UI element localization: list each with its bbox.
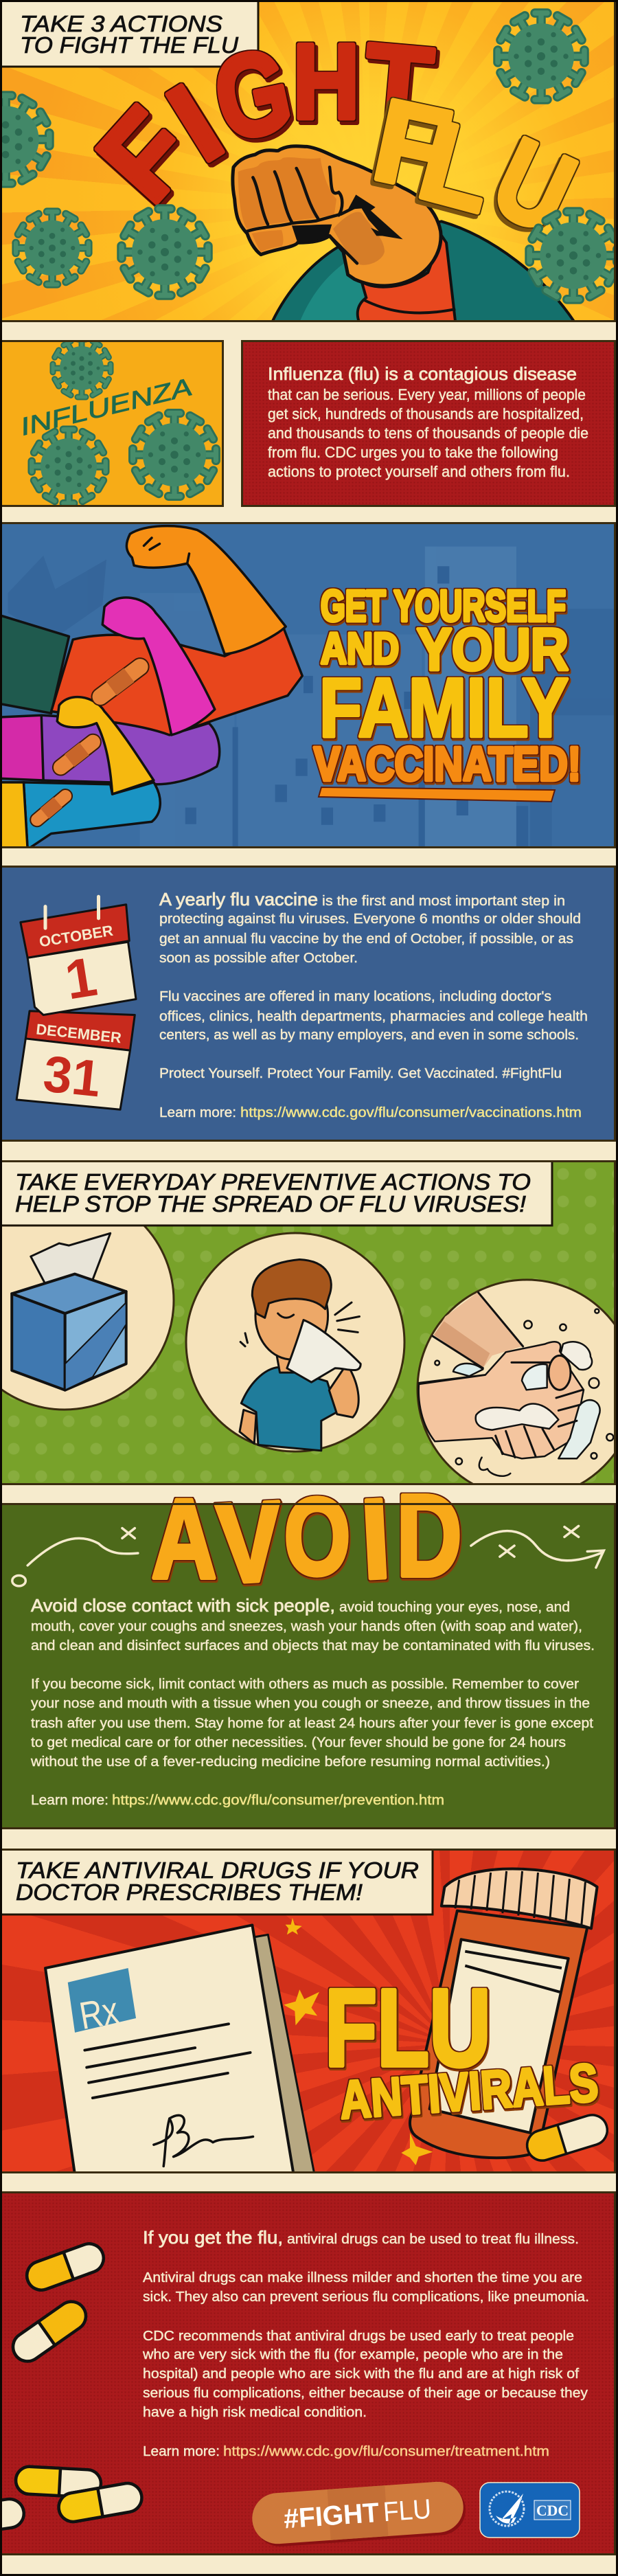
- left arm: [240, 1410, 256, 1443]
- avoid text block: and clean and disinfect surfaces and objects that may be contaminated with flu viruses.: [31, 1638, 595, 1653]
- bandage badge: #fight flu: [251, 2480, 467, 2549]
- hair: [252, 1260, 331, 1318]
- antiviral text block: Learn more:: [143, 2444, 220, 2459]
- avoid text block: If you become sick, limit contact with others as much as possible. Remember to cover: [31, 1677, 579, 1692]
- influenza text block: and thousands to tens of thousands of people die: [268, 425, 588, 442]
- bandage medium: [49, 731, 104, 778]
- influenza text block: Influenza (flu) is a contagious disease: [268, 363, 577, 384]
- tissue box faces: [12, 1274, 126, 1390]
- virus top: [53, 339, 111, 397]
- logo: hhs and cdc: CDC: [536, 2502, 569, 2519]
- signature: [154, 2115, 253, 2166]
- circle: tissue box: [0, 1191, 174, 1410]
- panel: influenza description: [241, 340, 616, 507]
- arm: teal sleeve: [0, 615, 69, 713]
- influenza text block: get sick, hundreds of thousands are hospitalized,: [268, 405, 584, 422]
- rx badge: [68, 1968, 136, 2033]
- antiviral text block: If you get the flu,: [143, 2227, 283, 2248]
- avoid text block: [30, 1595, 595, 1808]
- influenza text block: from flu. CDC urges you to take the following: [268, 444, 558, 461]
- circle: person sneezing into tissue: [186, 1233, 404, 1451]
- lower arm and hand: [419, 1342, 584, 1458]
- prescription lines: [84, 2024, 250, 2098]
- bandage badge: #fight flu: FLU: [382, 2494, 432, 2527]
- vaccine text block: protecting against flu viruses. Everyone 6 months or older should: [159, 912, 581, 927]
- header box: take 3 actions: TAKE 3 ACTIONS: [20, 11, 222, 36]
- arm: magenta: [102, 598, 215, 735]
- flu virus left: [0, 95, 49, 183]
- title word: FIGHT: T: [360, 20, 437, 148]
- fingers: [549, 1355, 571, 1390]
- arm: yellow sleeve: [0, 782, 27, 849]
- panel: antiviral details: [0, 2191, 616, 2555]
- title word: FIGHT: G: [203, 23, 301, 166]
- antiviral text block: hospital) and people who are sick with the flu and are at high risk of: [143, 2366, 579, 2382]
- upper arm: [434, 1293, 522, 1368]
- antiviral text block: https://www.cdc.gov/flu/consumer/treatment.htm: [223, 2444, 549, 2459]
- header box: preventive actions: [0, 1158, 552, 1225]
- avoid text block: avoid touching your eyes, nose, and: [339, 1600, 570, 1615]
- avoid text block: Learn more:: [31, 1793, 108, 1808]
- heading: flu antivirals: FLU: [325, 1966, 491, 2089]
- vaccine text block: is the first and most important step in: [322, 894, 565, 909]
- soap bubbles upper: [561, 1342, 592, 1370]
- vaccine text block: Learn more:: [159, 1105, 236, 1120]
- title word: FLU: L: [408, 96, 507, 236]
- raised arm: [329, 1364, 358, 1417]
- pill two: [8, 2296, 91, 2367]
- logo: hhs and cdc: [480, 2483, 580, 2538]
- heading: avoid: O: [284, 1476, 351, 1598]
- virus right: [133, 414, 216, 496]
- influenza label: INFLUENZA: [17, 372, 195, 441]
- influenza text block: that can be serious. Every year, millions of people: [268, 386, 586, 403]
- calendar: december 31: 31: [41, 1044, 104, 1107]
- vaccine text block: [159, 889, 588, 1120]
- panel: antiviral drugs: [0, 1849, 616, 2173]
- bandage small: [27, 787, 75, 829]
- sneeze lines: [240, 1302, 359, 1346]
- influenza text block: [268, 363, 588, 480]
- rx symbol: Rx: [76, 1988, 122, 2037]
- arrow play diagram right: [471, 1526, 604, 1568]
- title word: FIGHT: I: [148, 61, 242, 185]
- arm: red: [52, 629, 302, 737]
- heading: avoid: I: [358, 1476, 393, 1603]
- arm: orange fist detail: [144, 538, 190, 563]
- arm: orange: [126, 526, 286, 654]
- vaccine text block: get an annual flu vaccine by the end of October, if possible, or as: [159, 931, 573, 947]
- heading: get yourself and your family vaccinated: [314, 581, 581, 791]
- stars: [284, 1918, 433, 2165]
- arm: yellow: [57, 697, 154, 794]
- pill: [523, 2111, 611, 2165]
- avoid text block: trash after you use them. Stay home for at least 24 hours after your fever is gone except: [31, 1716, 593, 1731]
- flu virus right: [529, 212, 617, 300]
- city skyline background: [8, 547, 618, 849]
- heading: get yourself and your family vaccinated: YOUR: [417, 617, 569, 683]
- vaccine text block: A yearly flu vaccine: [159, 889, 318, 909]
- avoid text block: your nose and mouth with a tissue when you cough or sneeze, and throw tissues in the: [31, 1696, 590, 1711]
- flu virus top right: [498, 13, 584, 100]
- illustration: calendars: [16, 896, 136, 1109]
- arrow play diagram left: [12, 1528, 138, 1586]
- calendar: october 1: 1: [61, 946, 101, 1012]
- panel: influenza virus art: [0, 340, 224, 507]
- antiviral text block: CDC recommends that antiviral drugs be used early to treat people: [143, 2329, 574, 2344]
- panel: avoid details: [0, 1503, 616, 1829]
- pill one: [23, 2239, 108, 2294]
- pill bottle cap: [442, 1869, 597, 1928]
- vaccine text block: soon as possible after October.: [159, 951, 358, 966]
- avoid text block: Avoid close contact with sick people,: [31, 1595, 335, 1616]
- arm: magenta sleeve: [0, 715, 43, 780]
- wrist lines: [419, 1293, 523, 1383]
- arm: blue: [23, 782, 160, 849]
- bandage large: [89, 655, 152, 709]
- panel: everyday preventive actions: [0, 1160, 616, 1485]
- heading: avoid: V: [214, 1478, 285, 1607]
- title word: FLU: F: [363, 74, 461, 217]
- heading underline: [319, 787, 555, 802]
- circle: washing hands with soap: [417, 1280, 618, 1498]
- antiviral text block: serious flu complications, either because of their age or because they: [143, 2386, 588, 2401]
- vaccine text block: https://www.cdc.gov/flu/consumer/vaccinations.htm: [240, 1105, 582, 1120]
- calendar: october 1: OCTOBER: [38, 922, 115, 951]
- illustration: family of flexing arms: [0, 526, 302, 849]
- title word: FIGHT: F: [73, 85, 218, 225]
- vaccine text block: offices, clinics, health departments, pharmacies and college health: [159, 1009, 588, 1024]
- head: [255, 1272, 328, 1359]
- antiviral text block: Antiviral drugs can make illness milder and shorten the time you are: [143, 2270, 582, 2285]
- calendar: october 1: [21, 896, 136, 1015]
- avoid text block: https://www.cdc.gov/flu/consumer/prevention.htm: [112, 1793, 444, 1808]
- title word: FLU: U: [476, 113, 593, 258]
- prescription page: [45, 1925, 294, 2175]
- pill three: [15, 2466, 102, 2498]
- panel: get vaccinated: [0, 522, 616, 848]
- pill five: [0, 2497, 25, 2535]
- avoid text block: to get medical care or for other necessities. (Your fever should be gone for 24 hours: [31, 1735, 566, 1750]
- illustration: superhero cape and sleeve: [272, 221, 575, 322]
- header box: preventive actions: HELP STOP THE SPREAD OF FLU VIRUSES!: [15, 1191, 526, 1217]
- vaccine text block: Protect Yourself. Protect Your Family. Get Vaccinated. #FightFlu: [159, 1066, 562, 1081]
- heading: avoid: A: [151, 1476, 217, 1602]
- virus bottom left: [32, 429, 106, 504]
- header box: take 3 actions: [0, 0, 258, 67]
- bandage badge: #fight flu: #FIGHT: [283, 2498, 380, 2534]
- pill four: [56, 2481, 144, 2524]
- antiviral text block: have a high risk medical condition.: [143, 2405, 367, 2420]
- title word: FIGHT: H: [293, 21, 360, 141]
- vaccine text block: centers, as well as by many employers, and even in some schools.: [159, 1028, 579, 1043]
- heading: avoid: D: [396, 1471, 462, 1601]
- influenza text block: actions to protect yourself and others from flu.: [268, 463, 570, 480]
- vaccine text block: Flu vaccines are offered in many locations, including doctor's: [159, 989, 551, 1004]
- neck: [276, 1351, 304, 1372]
- avoid text block: mouth, cover your coughs and sneezes, wash your hands often (with soap and water),: [31, 1619, 582, 1634]
- shirt: [241, 1368, 337, 1451]
- header box: antiviral: [0, 1846, 433, 1914]
- antiviral text block: antiviral drugs can be used to treat flu illness.: [287, 2232, 579, 2247]
- antiviral text block: who are very sick with the flu (for example, people who are in the: [142, 2347, 563, 2362]
- antiviral text block: [142, 2227, 589, 2459]
- pill bottle label: [430, 1939, 569, 2133]
- pill bottle body: [410, 1911, 587, 2158]
- arm: purple: [41, 715, 220, 784]
- title word: FLU: [363, 74, 593, 258]
- title word: FIGHT: [73, 20, 437, 225]
- calendar: december 31: [16, 1011, 135, 1109]
- heading: avoid: [151, 1471, 462, 1607]
- calendar: december 31: DECEMBER: [35, 1020, 122, 1046]
- soap bubbles lower: [476, 1404, 558, 1430]
- bubbles: [435, 1309, 613, 1465]
- header box: preventive actions: TAKE EVERYDAY PREVENTIVE ACTIONS TO: [15, 1169, 531, 1195]
- flu virus center: [122, 209, 208, 295]
- panel: vaccine details: [0, 866, 616, 1142]
- illustration: fist and arm: [233, 146, 455, 323]
- flu virus bottom left: [16, 212, 89, 284]
- header box: antiviral: TAKE ANTIVIRAL DRUGS IF YOUR: [16, 1857, 419, 1883]
- header box: antiviral: DOCTOR PRESCRIBES THEM!: [16, 1879, 363, 1905]
- panel: hero Fight Flu: [0, 0, 616, 322]
- heading: flu antivirals: [325, 1966, 600, 2130]
- antiviral text block: sick. They also can prevent serious flu complications, like pneumonia.: [143, 2290, 589, 2305]
- avoid text block: without the use of a fever-reducing medicine before resuming normal activities.): [30, 1754, 550, 1770]
- heading: get yourself and your family vaccinated: FAMILY: [319, 661, 569, 754]
- held tissue: [287, 1320, 360, 1382]
- header box: take 3 actions: TO FIGHT THE FLU: [20, 32, 238, 58]
- tissue: [31, 1233, 111, 1299]
- heading: get yourself and your family vaccinated: AND: [321, 624, 399, 673]
- prescription back cover: [254, 1934, 314, 2175]
